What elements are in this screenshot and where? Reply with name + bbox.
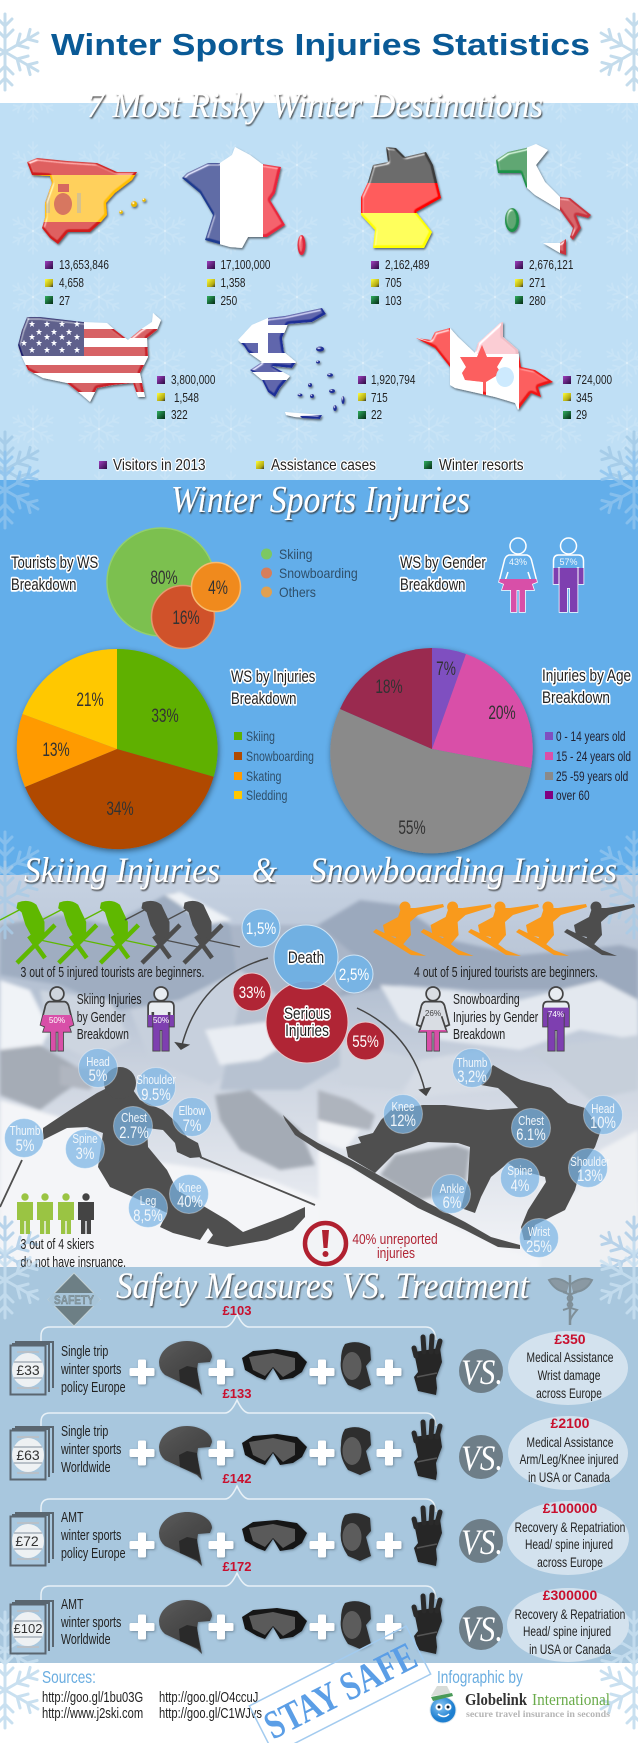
treatment ellipse: [507, 1500, 629, 1575]
bubble: death 2.5%: [335, 955, 373, 993]
policy document: £63: [16, 1447, 40, 1463]
heading: tourists by WS: Tourists by WS: [11, 553, 98, 572]
stats: Italy: [515, 259, 573, 308]
policy text: Worldwide: [61, 1630, 110, 1647]
snowboarder injury bubbles: Shoulder: [570, 1156, 610, 1169]
icon: snowboarding woman 26%: 26%: [425, 1009, 441, 1018]
VS badge: VS.: [461, 1438, 503, 1478]
treatment ellipse: Recovery & Repatriation: [515, 1606, 626, 1622]
icon: caduceus: [549, 1275, 592, 1325]
stats: France: 17,100,000: [220, 259, 270, 272]
pie chart: injuries by age: [330, 648, 533, 853]
policy document: [10, 1342, 53, 1394]
skier injury bubbles: 40%: [177, 1192, 203, 1212]
legend: WS by injuries: Snowboarding: [246, 749, 314, 764]
policy text: AMT: [61, 1508, 84, 1525]
treatment ellipse: Recovery & Repatriation: [515, 1519, 626, 1535]
logo: wordmark: secure travel insurance in seconds: [466, 1709, 611, 1719]
policy text: Single trip: [61, 1342, 108, 1359]
skier injury bubbles: 8,5%: [133, 1206, 163, 1226]
icon: section snowflakes: [0, 452, 638, 908]
legend: tourists by WS: Snowboarding: [279, 565, 358, 581]
skier injury bubbles: Head: [86, 1056, 110, 1069]
logo: wordmark: International: [532, 1690, 610, 1709]
treatment ellipse: across Europe: [537, 1554, 603, 1570]
text: unreported injuries: [352, 1231, 438, 1261]
legend: injuries by age: 15 - 24 years old: [556, 748, 631, 764]
snowboarder injury bubbles: Head: [591, 1103, 615, 1116]
row 3: AMT europe: £142: [223, 1471, 251, 1486]
pie chart: WS by injuries: [17, 649, 218, 849]
treatment ellipse: £100000: [543, 1500, 597, 1516]
bubble: serious 33%: [233, 973, 271, 1011]
stats: France: [207, 259, 270, 308]
policy text: winter sports: [60, 1613, 122, 1630]
sources links: http://goo.gl/C1WJvs: [159, 1705, 262, 1721]
treatment ellipse: Head/ spine injured: [523, 1623, 611, 1639]
legend: injuries by age: 25 -59 years old: [556, 768, 628, 784]
panel: footer: [0, 1626, 638, 1743]
stats: Greece: 1,920,794: [371, 374, 415, 387]
policy text: winter sports: [60, 1360, 122, 1377]
stats: Germany: 2,162,489: [385, 259, 429, 272]
text: skiing beginners: 3 out of 5 injured tourists are beginners.: [20, 964, 204, 980]
icon: man 57%: 57%: [559, 557, 578, 567]
icon: footer snowflakes: [0, 1652, 638, 1728]
skier injury bubbles: 5%: [89, 1066, 107, 1086]
sources links: http://goo.gl/1bu03G: [42, 1689, 143, 1705]
legend: WS by injuries: [234, 729, 314, 803]
icon: man 57%: [554, 538, 584, 612]
heading: 7 most risky: 7 Most Risky Winter Destinations: [87, 85, 543, 125]
arrow: to snowboarder: [357, 1008, 430, 1095]
skier injury bubbles: 7%: [183, 1116, 201, 1136]
icon: safety sign: [48, 1273, 100, 1326]
legend: tourists by WS: [261, 546, 358, 600]
stats: Italy: 280: [529, 295, 546, 308]
stats: Italy: 2,676,121: [529, 259, 573, 272]
stats: Canada: 345: [576, 392, 593, 405]
heading: safety vs treatment: Safety Measures VS. Treatment: [116, 1266, 531, 1307]
silhouette: snowboarder: [283, 1065, 601, 1249]
venn chart: tourists by WS: 16%: [172, 607, 200, 629]
venn chart: tourists by WS: 80%: [150, 567, 178, 589]
policy text: policy Europe: [61, 1544, 125, 1561]
legend: WS by injuries: Skiing: [246, 729, 275, 744]
row 3: AMT europe: [10, 1471, 629, 1575]
icon: safety sign: SAFETY: [54, 1293, 94, 1307]
stats: USA: 1,548: [174, 392, 199, 405]
skier injury bubbles: 2.7%: [119, 1123, 149, 1143]
icon: skiing woman 50%: 50%: [49, 1016, 65, 1025]
pie chart: WS by injuries: 21%: [76, 689, 104, 711]
VS badge: VS.: [461, 1352, 503, 1392]
venn chart: tourists by WS: 4%: [208, 577, 228, 599]
row 2: single trip worldwide: [10, 1386, 628, 1490]
map: Italy: [496, 144, 593, 258]
icon: header snowflakes: [0, 14, 638, 90]
text: skiing gender label: [77, 991, 142, 1042]
mountain photo background: [0, 892, 638, 1270]
bubble: serious injuries: Injuries: [285, 1022, 329, 1040]
stats: France: 1,358: [220, 277, 245, 290]
legend: destinations: Assistance cases: [271, 457, 376, 474]
treatment ellipse: [507, 1587, 629, 1662]
text: unreported injuries: injuries: [377, 1245, 415, 1261]
stats: Spain: 13,653,846: [59, 259, 109, 272]
bubble: death: [274, 925, 338, 989]
icon: snowboarding man 74%: [543, 987, 569, 1051]
policy text: AMT: [61, 1595, 84, 1612]
snowboarder injury bubbles: 13%: [577, 1166, 603, 1186]
venn chart: tourists by WS: [107, 528, 240, 648]
heading: injuries by age: [542, 667, 631, 707]
panel: header: [0, 0, 638, 103]
gear: [130, 1336, 442, 1395]
icon: snowboarding man 74%: 74%: [548, 1010, 564, 1019]
snowboarder injury bubbles: Spine: [507, 1165, 533, 1178]
treatment ellipse: Medical Assistance: [527, 1434, 614, 1450]
legend: destinations: Visitors in 2013: [113, 457, 206, 474]
text: snowboarding gender label: Breakdown: [453, 1026, 505, 1042]
policy text: winter sports: [60, 1526, 122, 1543]
skier injury bubbles: Chest: [121, 1112, 148, 1125]
pie chart: WS by injuries: 34%: [106, 798, 134, 820]
panel: risky destinations: [0, 85, 638, 508]
VS badge: VS.: [461, 1609, 503, 1649]
legend: WS by injuries: Skating: [246, 769, 282, 784]
snowboarder injury bubbles: Chest: [518, 1115, 545, 1128]
arrow: to skier: [176, 958, 268, 1049]
heading: WS by gender: [400, 553, 486, 594]
map: Greece: [230, 300, 344, 419]
sources links: http://goo.gl/O4ccuJ: [159, 1689, 258, 1705]
icons: five snowboarders: [373, 902, 635, 956]
skier injury bubbles: 5%: [16, 1136, 34, 1156]
bubble: serious injuries: Serious: [284, 1005, 330, 1023]
skier injury bubbles: Spine: [72, 1133, 98, 1146]
snowboarder injury bubbles: 6%: [443, 1193, 461, 1213]
heading: snowboarding injuries: Snowboarding Injuries: [310, 850, 617, 890]
skier injury bubbles: 9.5%: [141, 1085, 171, 1105]
policy text: [60, 1342, 125, 1395]
stats: Greece: [358, 374, 415, 422]
bubble: serious 33%: 33%: [239, 984, 265, 1002]
heading: winter sports injuries: Winter Sports Injuries: [171, 479, 470, 521]
policy text: Single trip: [61, 1422, 108, 1439]
gear: [130, 1421, 442, 1480]
legend: injuries by age: 0 - 14 years old: [556, 728, 625, 744]
treatment ellipse: Wrist damage: [538, 1367, 601, 1383]
panel: winter sports injuries: [0, 452, 638, 908]
text: skiing gender label: by Gender: [77, 1009, 125, 1025]
snowboarder injury bubbles: 4%: [511, 1176, 529, 1196]
snowboarder injury bubbles: Ankle: [440, 1183, 464, 1196]
heading: WS by injuries: [231, 667, 316, 708]
icon: section snowflakes: [0, 432, 638, 508]
legend: destinations: [99, 457, 524, 474]
treatment ellipse: Arm/Leg/Knee injured: [520, 1451, 619, 1467]
bubble: serious 55%: [346, 1022, 384, 1060]
heading: WS by gender: Breakdown: [400, 575, 465, 594]
bubble: death 2.5%: 2,5%: [339, 966, 369, 984]
legend: destinations: Winter resorts: [439, 457, 524, 474]
gear: [130, 1595, 442, 1654]
treatment ellipse: in USA or Canada: [528, 1469, 610, 1485]
treatment ellipse: £2100: [551, 1415, 590, 1431]
skier injury bubbles: [4, 1048, 212, 1228]
text: insurance: do not have insruance.: [20, 1254, 126, 1270]
map: France: [175, 145, 306, 255]
heading: tourists by WS: Breakdown: [11, 575, 76, 594]
bubble: serious injuries: [266, 981, 348, 1063]
heading: WS by injuries: WS by Injuries: [231, 667, 316, 686]
text: insurance: 3 out of 4 skiers: [20, 1236, 94, 1252]
policy text: winter sports: [60, 1440, 122, 1457]
map: USA: [15, 310, 165, 405]
stats: Spain: 4,658: [59, 277, 84, 290]
icon: skiing man 50%: [148, 987, 174, 1051]
skier injury bubbles: Elbow: [179, 1105, 206, 1118]
panel: skiing and snowboarding injuries: [0, 850, 638, 1293]
icon: woman 43%: [499, 538, 537, 612]
policy document: [10, 1513, 53, 1566]
skier injury bubbles: Knee: [178, 1182, 202, 1195]
text: snowboarding gender label: [453, 991, 538, 1042]
treatment ellipse: Head/ spine injured: [525, 1536, 613, 1552]
pie chart: injuries by age: 7%: [436, 658, 456, 680]
treatment ellipse: [508, 1331, 628, 1405]
legend: WS by injuries: Sledding: [246, 788, 287, 803]
skier injury bubbles: Thumb: [10, 1125, 40, 1138]
policy document: [10, 1427, 53, 1480]
snowboarder injury bubbles: Knee: [391, 1101, 415, 1114]
infographic by heading: Infographic by: [437, 1668, 523, 1688]
heading: injuries by age: Breakdown: [542, 689, 610, 707]
icon: skiing man 50%: 50%: [153, 1016, 169, 1025]
sources links: [42, 1689, 262, 1721]
VS badge: VS.: [461, 1522, 503, 1562]
stats: USA: 3,800,000: [171, 374, 215, 387]
heading: injuries by age: Injuries by Age: [542, 667, 631, 685]
icon: warning: [305, 1223, 346, 1264]
treatment ellipse: Medical Assistance: [527, 1349, 614, 1365]
icon: skiing woman 50%: [41, 987, 73, 1051]
policy text: policy Europe: [61, 1378, 125, 1395]
skier injury bubbles: Shoulder: [136, 1074, 176, 1087]
pie chart: WS by injuries: 13%: [42, 739, 70, 761]
text: skiing gender label: Breakdown: [77, 1026, 129, 1042]
stats: Canada: 724,000: [576, 374, 612, 387]
pie chart: injuries by age: 20%: [488, 702, 516, 724]
snowboarder injury bubbles: Wrist: [528, 1226, 551, 1239]
icon: woman 43%: 43%: [509, 557, 527, 567]
snowboarder injury bubbles: Thumb: [457, 1057, 487, 1070]
snowboarder injury bubbles: [384, 1048, 622, 1258]
policy document: £72: [15, 1533, 39, 1549]
treatment ellipse: £350: [554, 1331, 586, 1347]
stats: Canada: [563, 374, 612, 422]
legend: tourists by WS: Others: [279, 584, 316, 600]
heading: skiing injuries: Skiing Injuries: [24, 850, 220, 890]
bubble: death 1.5%: [242, 909, 280, 947]
policy text: Worldwide: [61, 1458, 110, 1475]
text: insurance: [20, 1236, 126, 1270]
icon: section snowflakes: [0, 1242, 638, 1688]
stats: USA: 322: [171, 409, 188, 422]
heading: WS by injuries: Breakdown: [231, 689, 296, 708]
heading: WS by gender: WS by Gender: [400, 553, 486, 572]
panel: safety vs treatment: [0, 1242, 638, 1688]
legend: tourists by WS: Skiing: [279, 546, 313, 562]
title: Winter Sports Injuries Statistics: [51, 27, 590, 62]
sources links: http://www.j2ski.com: [42, 1705, 143, 1721]
row 2: single trip worldwide: £133: [223, 1386, 251, 1401]
pie chart: injuries by age: 18%: [375, 676, 403, 698]
stats: Germany: 705: [385, 277, 402, 290]
bubble: death 1.5%: 1,5%: [246, 920, 276, 938]
icons: five skiers: [0, 901, 240, 963]
silhouette: skier: [0, 1067, 315, 1247]
icons: insured skiers: [17, 1193, 94, 1234]
bubble: serious 55%: 55%: [352, 1033, 379, 1051]
text: snowboarding gender label: Injuries by Gender: [453, 1009, 538, 1025]
map: Germany: [360, 147, 444, 251]
skier injury bubbles: Leg: [140, 1195, 156, 1208]
text: unreported injuries: 40% unreported: [352, 1231, 438, 1247]
pie chart: WS by injuries: 33%: [151, 705, 179, 727]
icon: snowboarding woman 26%: [417, 987, 449, 1051]
stats: Italy: 271: [529, 277, 546, 290]
stats: Greece: 715: [371, 392, 388, 405]
sources heading: Sources:: [42, 1668, 96, 1688]
map: Canada: [416, 322, 554, 412]
heading: ampersand: &: [252, 850, 277, 890]
policy document: £102: [14, 1621, 42, 1636]
text: snowboarding gender label: Snowboarding: [453, 991, 520, 1007]
treatment ellipse: [508, 1415, 628, 1490]
stats: Greece: 22: [371, 409, 382, 422]
bubble: death: Death: [288, 949, 324, 967]
legend: injuries by age: [545, 728, 631, 803]
snowboarder injury bubbles: 10%: [590, 1113, 616, 1133]
stats: France: 250: [220, 295, 237, 308]
gear: [130, 1507, 442, 1566]
policy text: [60, 1422, 122, 1475]
policy document: [10, 1601, 53, 1654]
icon: section snowflakes: [0, 862, 638, 1293]
snowboarder injury bubbles: 3,2%: [457, 1067, 487, 1087]
policy text: [60, 1508, 125, 1561]
snowboarder injury bubbles: 12%: [390, 1111, 416, 1131]
treatment ellipse: £300000: [543, 1587, 597, 1603]
heading: tourists by WS: [11, 553, 98, 594]
stats: Germany: [371, 259, 429, 308]
stats: Spain: [45, 259, 109, 308]
snowboarder injury bubbles: 6.1%: [516, 1125, 546, 1145]
logo: wordmark: Globelink: [465, 1690, 527, 1709]
row 4: AMT worldwide: £172: [223, 1559, 251, 1574]
treatment ellipse: in USA or Canada: [529, 1641, 611, 1657]
text: skiing gender label: Skiing Injuries: [77, 991, 142, 1007]
row 1: single trip europe: £103: [223, 1303, 251, 1318]
stats: USA: [157, 374, 215, 422]
policy text: [60, 1595, 122, 1647]
row 4: AMT worldwide: [10, 1559, 629, 1662]
treatment ellipse: across Europe: [536, 1385, 602, 1401]
row 1: single trip europe: [10, 1303, 628, 1405]
logo: globe: [430, 1686, 456, 1723]
legend: injuries by age: over 60: [556, 787, 590, 803]
stats: Germany: 103: [385, 295, 402, 308]
policy document: £33: [16, 1362, 40, 1378]
map: Spain: [27, 158, 148, 246]
skier injury bubbles: 3%: [76, 1144, 94, 1164]
pie chart: injuries by age: 55%: [398, 817, 426, 839]
text: snowboarding beginners: 4 out of 5 injured tourists are beginners.: [414, 964, 598, 980]
stats: Canada: 29: [576, 409, 587, 422]
stats: Spain: 27: [59, 295, 70, 308]
logo: wordmark: [465, 1690, 611, 1719]
snowboarder injury bubbles: 25%: [526, 1237, 552, 1257]
